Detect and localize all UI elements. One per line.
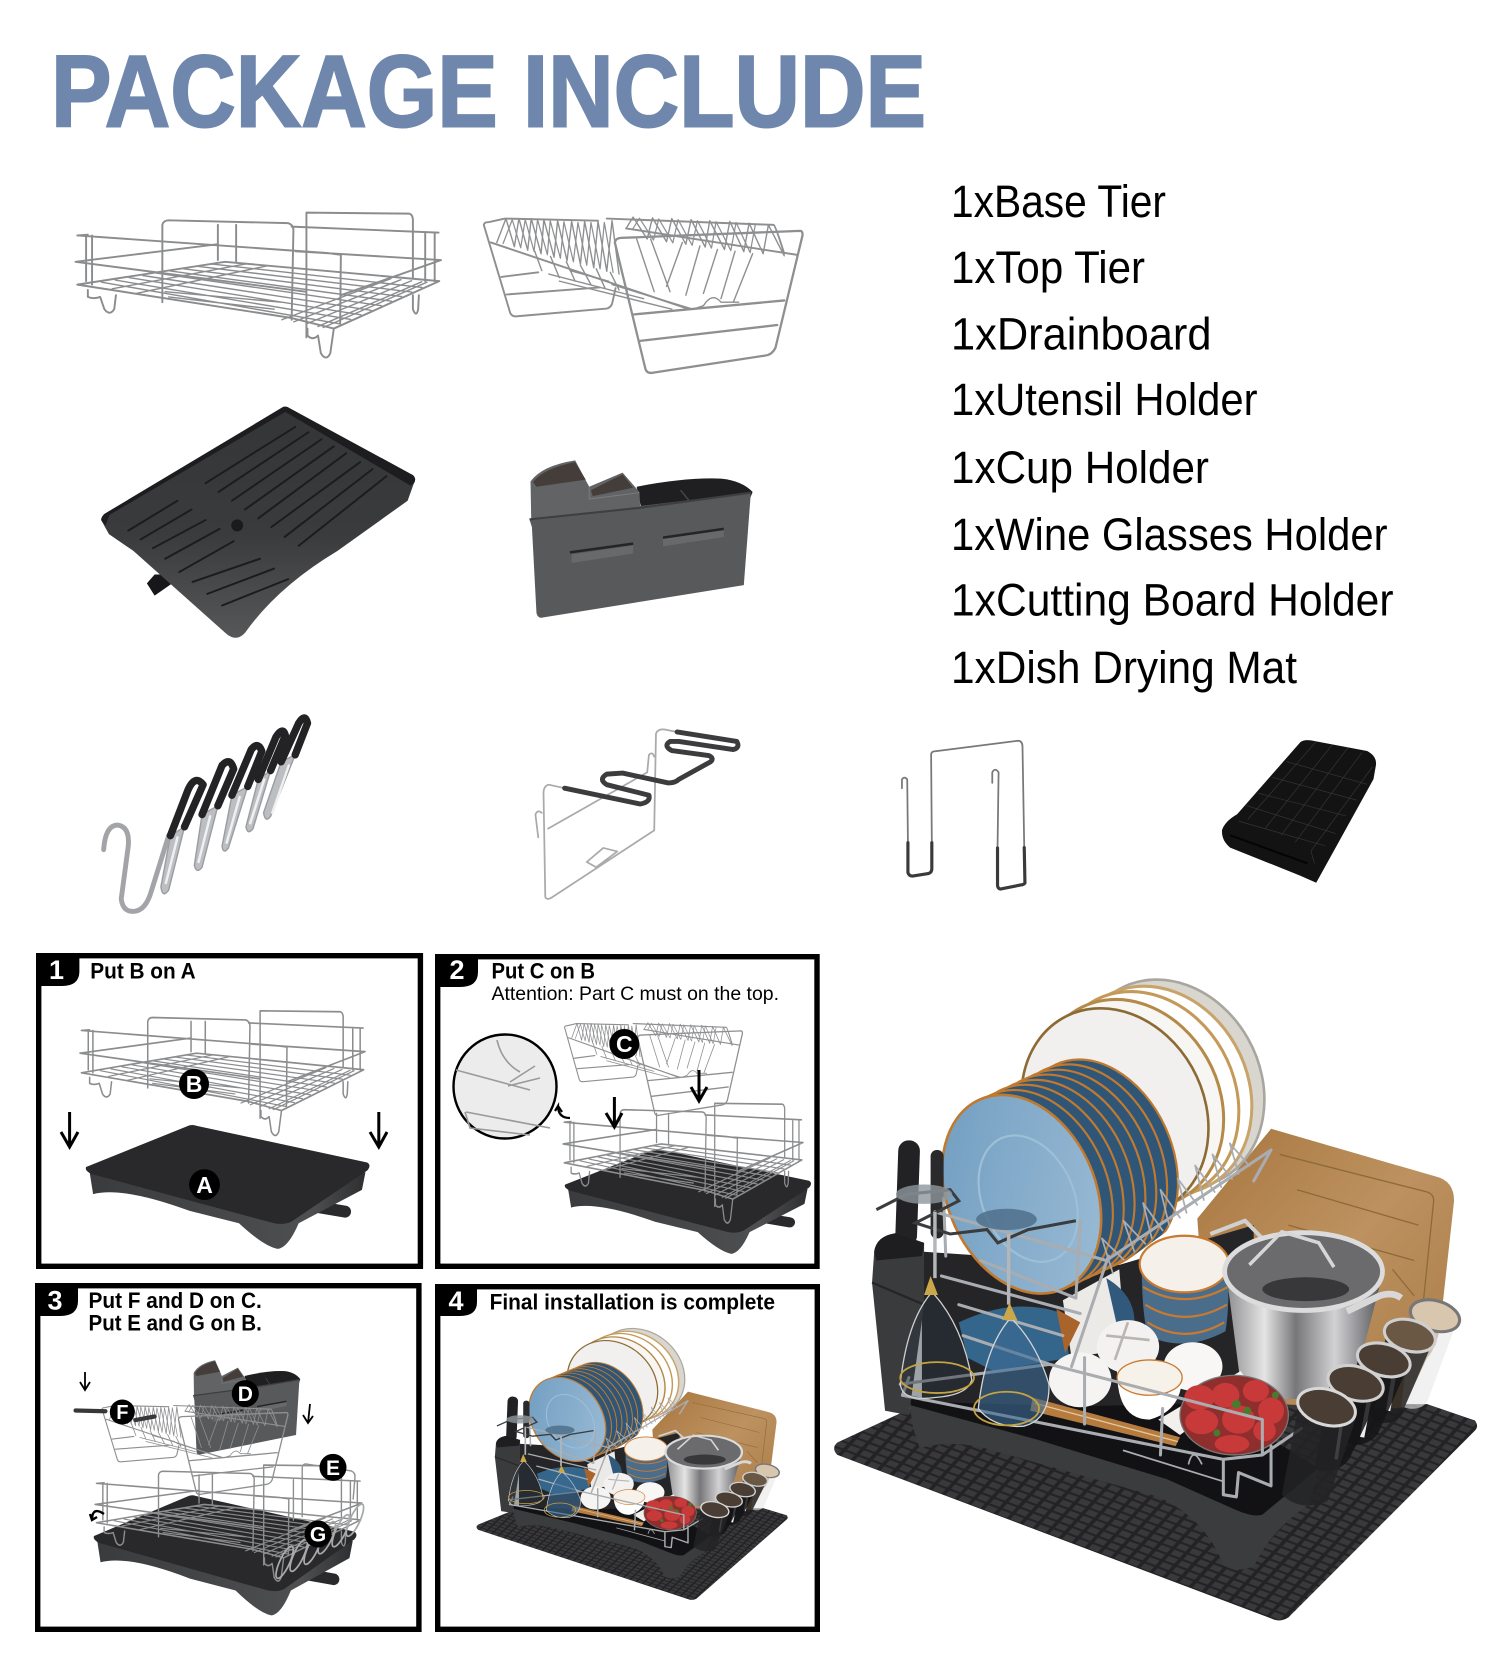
tray base xyxy=(909,1397,1319,1570)
panel: step 2 xyxy=(435,954,817,1266)
part label B xyxy=(179,1069,209,1099)
step 4 badge: 4 xyxy=(448,1286,464,1316)
part D holder xyxy=(193,1360,300,1455)
knives and knife block xyxy=(872,1140,944,1415)
step 3 heading: Put E and G on B. xyxy=(88,1311,262,1336)
tumblers xyxy=(1282,1295,1463,1506)
drainboard under rack xyxy=(565,1149,811,1254)
step 3 badge xyxy=(35,1283,78,1316)
part: base tier wire rack xyxy=(76,213,441,358)
step 3 badge: 3 xyxy=(47,1286,63,1316)
part: dish drying towel xyxy=(1222,740,1376,883)
part C rack xyxy=(565,1023,742,1115)
parts list: 1xCutting Board Holder xyxy=(951,574,1394,626)
step 1 badge: 1 xyxy=(49,955,64,985)
step 1 heading: Put B on A xyxy=(90,958,196,983)
parts list: 1xUtensil Holder xyxy=(951,374,1258,425)
step 2 badge xyxy=(435,954,478,987)
parts list: 1xTop Tier xyxy=(951,242,1145,293)
step 4 badge xyxy=(435,1284,477,1316)
part label G: G xyxy=(310,1524,326,1546)
panel: step 1 xyxy=(36,953,420,1266)
cups and saucers xyxy=(1030,1320,1249,1446)
part label B: B xyxy=(186,1071,202,1097)
assembled rack B xyxy=(563,1103,803,1223)
panel: step 4 xyxy=(435,1284,817,1629)
down arrows xyxy=(61,1112,387,1147)
part: cutting board holder xyxy=(902,741,1025,889)
step 2 badge: 2 xyxy=(449,955,465,985)
parts F, E, G wires xyxy=(76,1411,367,1580)
assembled rack thumbnail xyxy=(477,1314,788,1600)
part B rack xyxy=(80,1011,365,1135)
strawberries xyxy=(1180,1375,1288,1455)
small arrows xyxy=(80,1372,313,1520)
part label E: E xyxy=(326,1457,340,1480)
parts list: 1xDrainboard xyxy=(951,308,1212,360)
part label C xyxy=(609,1029,639,1059)
down arrows xyxy=(606,1070,707,1127)
pot xyxy=(1210,1221,1401,1399)
part label F xyxy=(110,1400,135,1424)
parts list: 1xDish Drying Mat xyxy=(951,642,1297,693)
base rack B xyxy=(95,1465,362,1581)
step 2 attention note: Attention: Part C must on the top. xyxy=(492,983,779,1005)
assembled rack product photo xyxy=(834,945,1477,1620)
rotate arrow xyxy=(555,1106,570,1118)
part: cup holder wire xyxy=(535,729,738,899)
blue plates xyxy=(912,1033,1208,1320)
part label A: A xyxy=(196,1172,213,1198)
part: S hooks xyxy=(104,718,307,911)
bowls xyxy=(1140,1236,1229,1343)
part label C: C xyxy=(616,1031,633,1057)
drying mat xyxy=(834,1404,1477,1620)
step 4 heading: Final installation is complete xyxy=(490,1289,775,1314)
part label D: D xyxy=(238,1383,253,1406)
step 3 heading xyxy=(88,1288,262,1336)
step 3 heading: Put F and D on C. xyxy=(88,1288,262,1313)
magnifier detail xyxy=(454,1034,556,1138)
white plates xyxy=(985,945,1301,1252)
drainboard A xyxy=(86,1125,369,1249)
wire rack xyxy=(900,1143,1301,1497)
part label A xyxy=(189,1169,220,1200)
parts list: 1xBase Tier xyxy=(951,176,1166,227)
lower plates xyxy=(959,1269,1135,1371)
part: drainboard xyxy=(101,407,415,638)
part: utensil holder xyxy=(529,460,753,618)
wine glass holder xyxy=(876,1184,1076,1305)
part: top tier wire rack xyxy=(484,217,803,373)
cutting board xyxy=(1197,1129,1454,1409)
step 2 heading: Put C on B xyxy=(492,958,595,983)
panel: step 3 xyxy=(35,1283,419,1629)
top rack C xyxy=(102,1405,288,1494)
part label E xyxy=(320,1454,346,1481)
lower rack interior xyxy=(922,1225,1254,1406)
wine glasses xyxy=(900,1276,1049,1426)
parts list: 1xCup Holder xyxy=(951,442,1209,493)
parts list xyxy=(951,176,1394,693)
title: PACKAGE INCLUDE xyxy=(51,34,926,148)
part label D xyxy=(232,1380,259,1407)
drainboard xyxy=(94,1495,356,1615)
step 1 badge xyxy=(36,953,79,986)
parts list: 1xWine Glasses Holder xyxy=(951,509,1388,560)
part label G xyxy=(304,1520,332,1548)
part label F: F xyxy=(116,1402,128,1424)
